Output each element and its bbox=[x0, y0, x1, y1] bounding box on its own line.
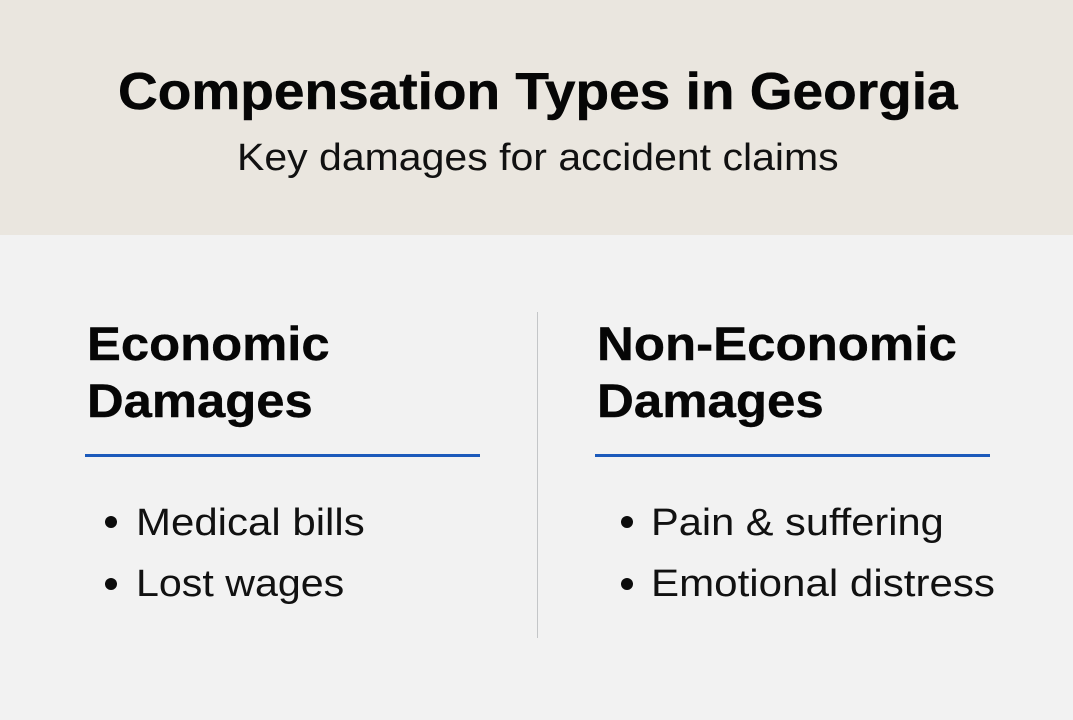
title: Compensation Types in Georgia bbox=[118, 63, 958, 121]
heading rule bbox=[595, 454, 990, 457]
center divider bbox=[537, 312, 538, 638]
heading: non-economic damages: Non-Economic bbox=[597, 317, 957, 370]
heading rule bbox=[85, 454, 480, 457]
heading: economic damages: Economic bbox=[87, 317, 330, 370]
panel: economic damages bbox=[85, 317, 480, 605]
heading: economic damages bbox=[87, 317, 330, 428]
bullet list: non-economic bbox=[621, 502, 995, 605]
header band bbox=[0, 0, 1073, 235]
item: emotional distress: Emotional distress bbox=[651, 563, 995, 605]
item: medical bills: Medical bills bbox=[136, 502, 365, 544]
heading: non-economic damages bbox=[597, 317, 957, 428]
subtitle: Key damages for accident claims bbox=[236, 137, 838, 179]
bullet list: economic bbox=[105, 502, 365, 605]
item: pain and suffering: Pain & suffering bbox=[651, 502, 944, 544]
heading: non-economic damages: Damages bbox=[597, 374, 824, 427]
panel: non-economic damages bbox=[595, 317, 995, 605]
heading: economic damages: Damages bbox=[87, 374, 313, 427]
item: lost wages: Lost wages bbox=[136, 563, 344, 605]
